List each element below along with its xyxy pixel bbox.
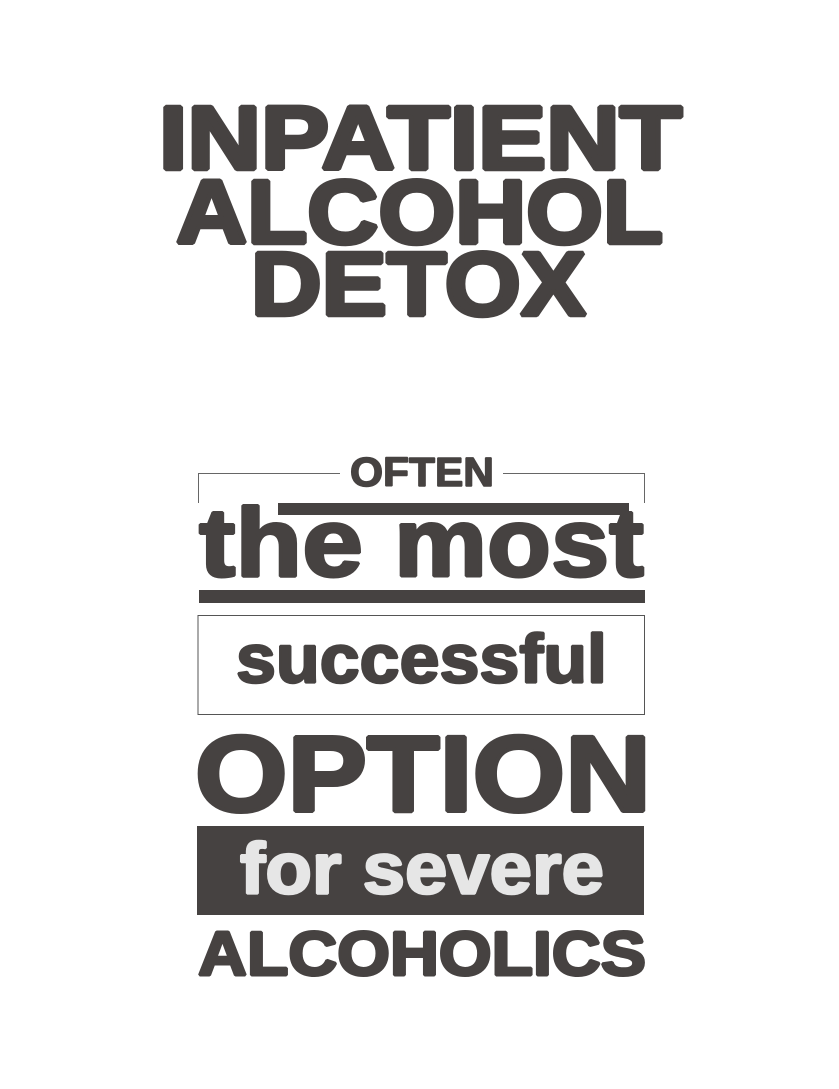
box: for severe: for severe: [240, 830, 604, 910]
bar below the most: [199, 590, 645, 603]
box: for severe: [197, 826, 644, 915]
bracket frame around OFTEN: [198, 474, 644, 503]
box: successful: successful: [236, 620, 607, 698]
title: [159, 89, 682, 335]
bar above the most: [278, 503, 629, 515]
text: OFTEN: OFTEN: [350, 449, 494, 495]
text: the most: most: [394, 488, 644, 597]
text: ALCOHOLICS: ALCOHOLICS: [198, 920, 646, 989]
title: DETOX: [251, 235, 586, 335]
text: the most: the: [199, 488, 363, 597]
title: INPATIENT: [159, 89, 682, 189]
title: ALCOHOL: [176, 163, 663, 263]
panel: statement: [195, 449, 651, 989]
text: OPTION: OPTION: [195, 713, 651, 834]
box: successful: [198, 616, 644, 714]
